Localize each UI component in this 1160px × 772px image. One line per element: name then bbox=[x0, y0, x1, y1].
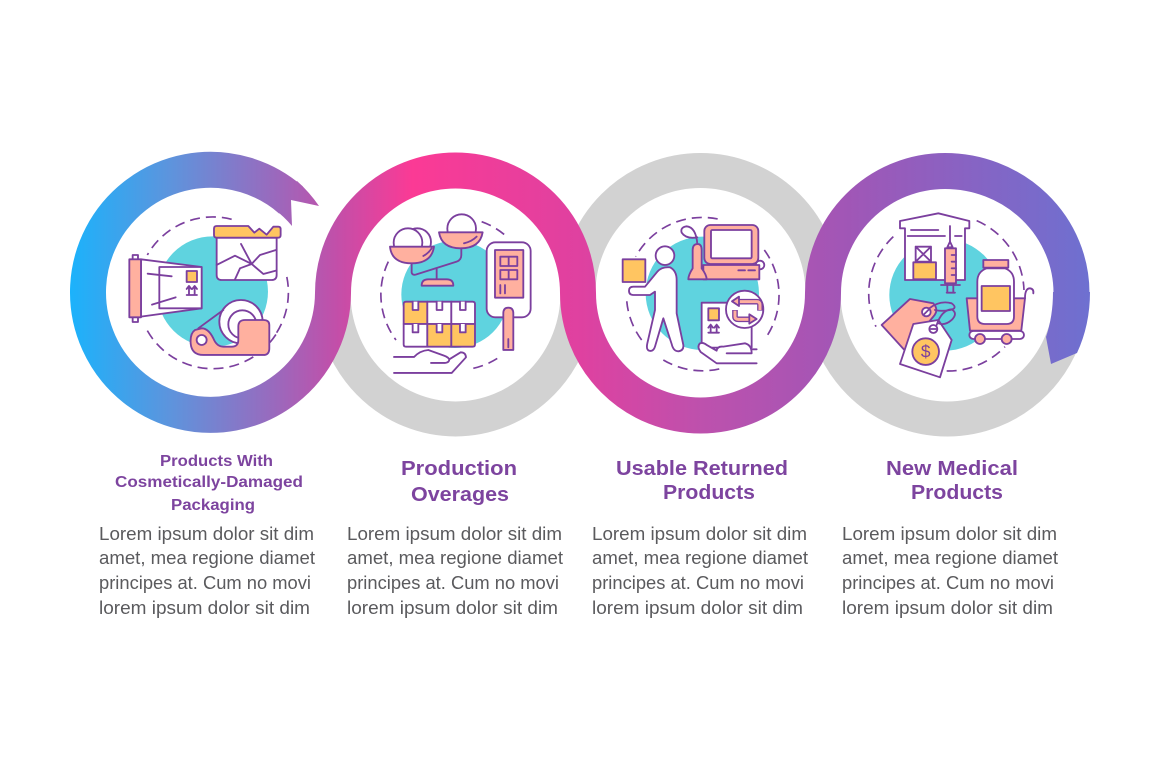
step 4 text: lorem ipsum dolor sit dim bbox=[842, 597, 1053, 618]
step 2 heading: Overages bbox=[411, 483, 509, 506]
bottle in cart bbox=[967, 260, 1033, 344]
step 1 text bbox=[99, 523, 315, 618]
step 1 heading bbox=[115, 453, 303, 514]
test device bbox=[487, 242, 531, 350]
gradient ribbon with arrow ends bbox=[88, 170, 1090, 416]
step 1 text: lorem ipsum dolor sit dim bbox=[99, 597, 310, 618]
step 1 heading: Products With bbox=[160, 453, 273, 470]
grid of boxes bbox=[404, 302, 475, 347]
returned box in hand bbox=[698, 291, 763, 363]
step 2 text: Lorem ipsum dolor sit dim bbox=[347, 523, 562, 544]
open hand bbox=[394, 350, 466, 373]
warehouse bbox=[900, 213, 969, 280]
step 4 heading: New Medical bbox=[886, 457, 1018, 480]
ultrasound machine bbox=[681, 225, 764, 279]
price tags bbox=[882, 299, 955, 377]
grey ribbon behind the steps bbox=[333, 170, 1072, 419]
tape dispenser bbox=[191, 300, 269, 355]
step 4 text bbox=[842, 523, 1058, 618]
step 1 text: Lorem ipsum dolor sit dim bbox=[99, 523, 314, 544]
step 4 heading bbox=[886, 457, 1018, 504]
step 2 text: amet, mea regione diamet bbox=[347, 547, 563, 568]
step 4 text: Lorem ipsum dolor sit dim bbox=[842, 523, 1057, 544]
step 4 heading: Products bbox=[911, 481, 1003, 504]
icon: production overages bbox=[381, 214, 531, 373]
icon: damaged packaging bbox=[129, 217, 288, 369]
step 3 text bbox=[592, 523, 808, 618]
syringe bbox=[941, 226, 960, 293]
step 4 text: amet, mea regione diamet bbox=[842, 547, 1058, 568]
step 3 text: principes at. Cum no movi bbox=[592, 572, 804, 593]
step 3 text: amet, mea regione diamet bbox=[592, 547, 808, 568]
step 3 text: lorem ipsum dolor sit dim bbox=[592, 597, 803, 618]
step 1 heading: Cosmetically-Damaged bbox=[115, 474, 303, 491]
icon: new medical products bbox=[869, 213, 1033, 377]
cracked box bbox=[214, 226, 281, 280]
step 1 heading: Packaging bbox=[171, 497, 255, 514]
icon: usable returned products bbox=[623, 217, 779, 371]
balance scale bbox=[390, 214, 483, 286]
step 2 text bbox=[347, 523, 563, 618]
step 3 text: Lorem ipsum dolor sit dim bbox=[592, 523, 807, 544]
step 2 heading bbox=[401, 457, 517, 506]
step 3 heading bbox=[616, 457, 788, 504]
shipping tape roll bbox=[129, 255, 202, 322]
step 2 text: principes at. Cum no movi bbox=[347, 572, 559, 593]
step 2 heading: Production bbox=[401, 457, 517, 480]
step 3 heading: Usable Returned bbox=[616, 457, 788, 480]
person carrying box bbox=[623, 246, 683, 351]
step 4 text: principes at. Cum no movi bbox=[842, 572, 1054, 593]
step 1 text: principes at. Cum no movi bbox=[99, 572, 311, 593]
step 1 text: amet, mea regione diamet bbox=[99, 547, 315, 568]
step 2 text: lorem ipsum dolor sit dim bbox=[347, 597, 558, 618]
price tags: $ bbox=[921, 342, 931, 362]
step 3 heading: Products bbox=[663, 481, 755, 504]
